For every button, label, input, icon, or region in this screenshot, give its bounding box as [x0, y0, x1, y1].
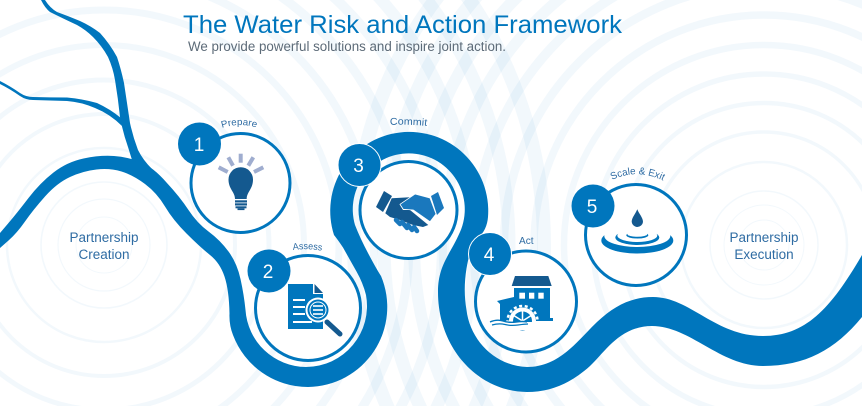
- curved label guide: assess: [293, 249, 323, 251]
- ring 2: [256, 256, 360, 360]
- title: The Water Risk and Action Framework: [183, 11, 623, 39]
- badge 2: [248, 250, 290, 292]
- background ripples: left centre: [0, 0, 544, 406]
- label: scale and exit: Scale & Exit: [610, 168, 666, 180]
- label: act: Act: [519, 236, 534, 247]
- number 4: 4: [484, 245, 495, 266]
- badge 5: [572, 184, 614, 228]
- curved label guide: commit: [390, 125, 427, 126]
- label: partnership execution: Partnership: [729, 230, 799, 245]
- icon: water drop with ripples: [601, 209, 673, 254]
- number 5: 5: [587, 197, 597, 218]
- label: prepare: Prepare: [221, 120, 257, 128]
- number 1: 1: [194, 135, 204, 156]
- background ripples: right centre: [354, 0, 862, 406]
- step 3: commit: [338, 118, 458, 260]
- icon: water mill: [490, 276, 553, 336]
- step 4: act: [468, 232, 576, 352]
- badge 3: [338, 144, 381, 186]
- label: partnership execution: Execution: [734, 247, 794, 262]
- step 5: scale and exit: [572, 168, 688, 287]
- icon: document and magnifier: [288, 284, 340, 334]
- ring 1: [191, 134, 290, 232]
- label: assess: Assess: [293, 243, 322, 250]
- number 2: 2: [263, 262, 273, 283]
- river tributaries: [0, 0, 152, 169]
- icon: light bulb: [219, 154, 263, 210]
- ring 3: [360, 162, 457, 258]
- badge 1: [178, 122, 221, 166]
- label: partnership creation: Creation: [78, 247, 130, 262]
- badge 4: [468, 232, 512, 276]
- ring 4: [476, 251, 576, 352]
- step 2: assess: [248, 243, 362, 362]
- subtitle: We provide powerful solutions and inspire joint action.: [188, 39, 506, 54]
- number 3: 3: [353, 156, 364, 177]
- label: partnership creation: Partnership: [69, 230, 139, 245]
- ring 5: [586, 184, 686, 286]
- curved label guide: scale and exit: [612, 174, 664, 181]
- curved label guide: prepare: [222, 125, 258, 128]
- river: [0, 132, 862, 392]
- icon: handshake: [376, 191, 444, 231]
- label: commit: Commit: [390, 118, 428, 126]
- step 1: prepare: [178, 120, 292, 234]
